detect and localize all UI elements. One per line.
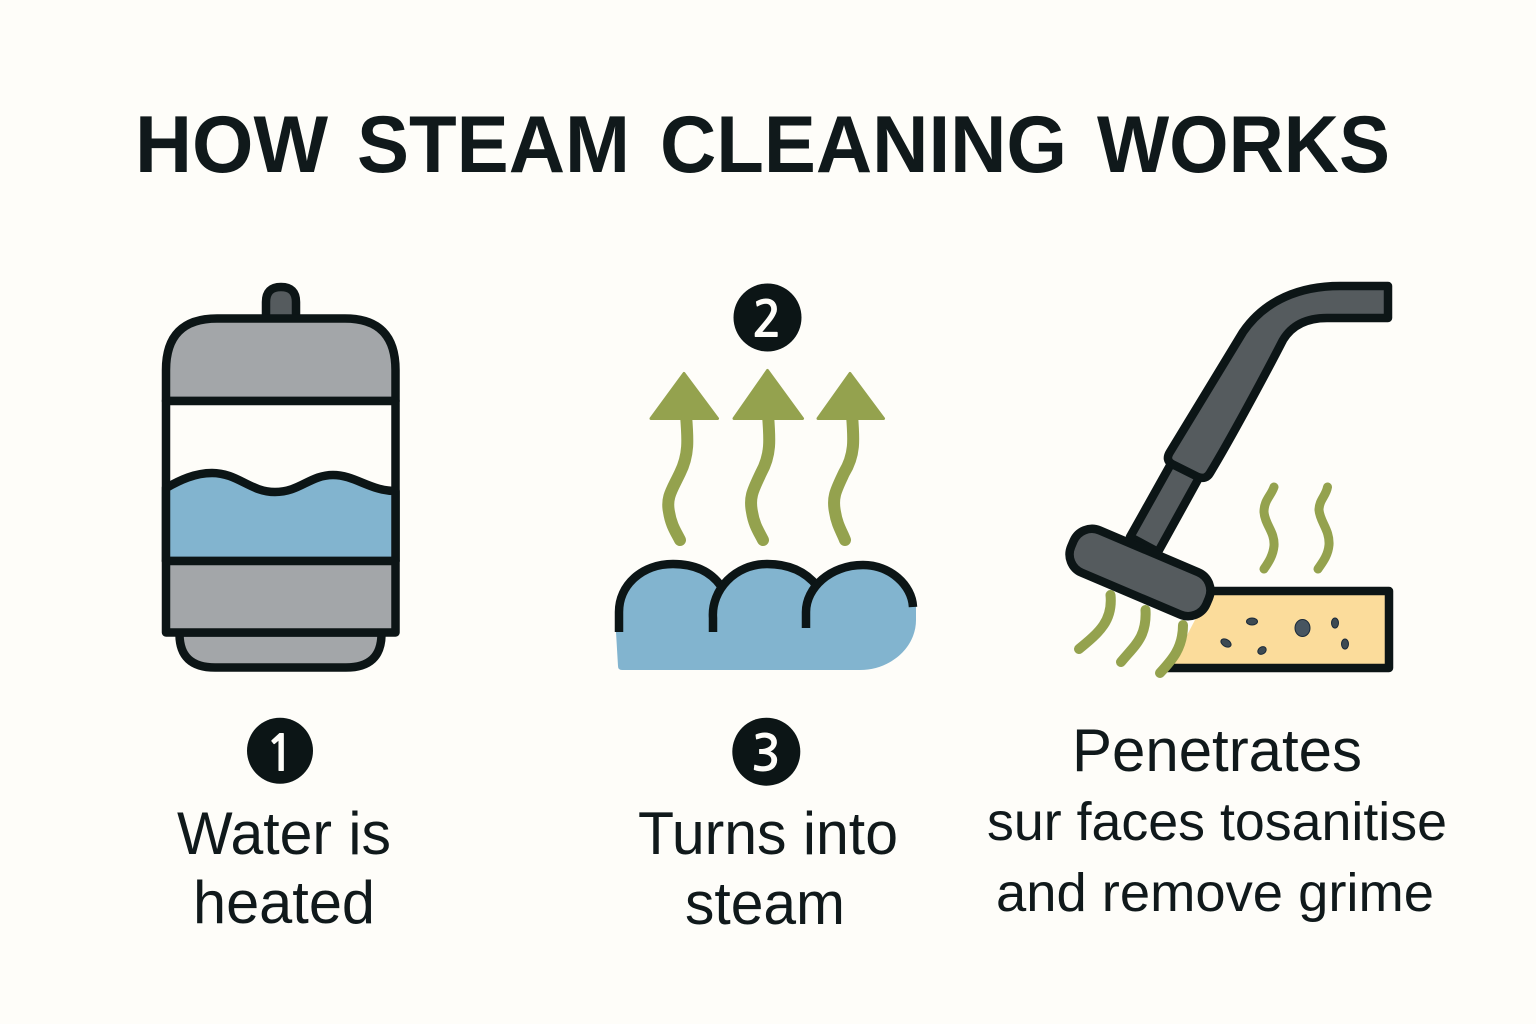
badge 3: 3 [751, 730, 781, 779]
steam wisps above sponge [1264, 487, 1329, 569]
tank upper section [166, 318, 396, 401]
sponge [1167, 591, 1389, 668]
badge 1 [247, 718, 313, 784]
text: turns into steam: Turns into [638, 800, 898, 867]
badge 2: 2 [752, 296, 782, 345]
icon: water boiler tank [166, 287, 396, 668]
title: HOW [135, 100, 329, 190]
tank cap [266, 287, 296, 319]
wand neck [1130, 462, 1200, 552]
text: turns into steam: steam [685, 870, 845, 937]
tank lower section [166, 561, 396, 632]
wand handle [1168, 286, 1388, 478]
text: penetrates surfaces: sur faces tosanitise [987, 792, 1447, 852]
arrow 1 [651, 374, 718, 540]
icon: steam arrows [651, 370, 884, 540]
text: turns into steam [638, 800, 898, 937]
title: CLEANING [660, 100, 1067, 190]
badge 3 [732, 718, 800, 786]
text: penetrates surfaces [987, 717, 1447, 923]
title: WORKS [1097, 100, 1390, 190]
water [166, 473, 396, 561]
icon: blue cloud of steam [616, 564, 916, 670]
tank base [180, 632, 382, 668]
text: water is heated: heated [193, 869, 375, 936]
badge 2 [734, 284, 802, 352]
text: penetrates surfaces: and remove grime [996, 863, 1434, 923]
arrow 3 [818, 374, 884, 540]
tank middle [166, 401, 396, 561]
text: penetrates surfaces: Penetrates [1072, 717, 1362, 784]
text: water is heated [177, 800, 391, 936]
badge 1: 1 [265, 730, 295, 779]
icon: steam cleaner on sponge [1063, 286, 1389, 673]
title: STEAM [357, 100, 630, 190]
steam wisps below nozzle [1079, 595, 1183, 673]
text: water is heated: Water is [177, 800, 391, 867]
arrow 2 [734, 370, 802, 540]
nozzle head [1063, 523, 1217, 622]
